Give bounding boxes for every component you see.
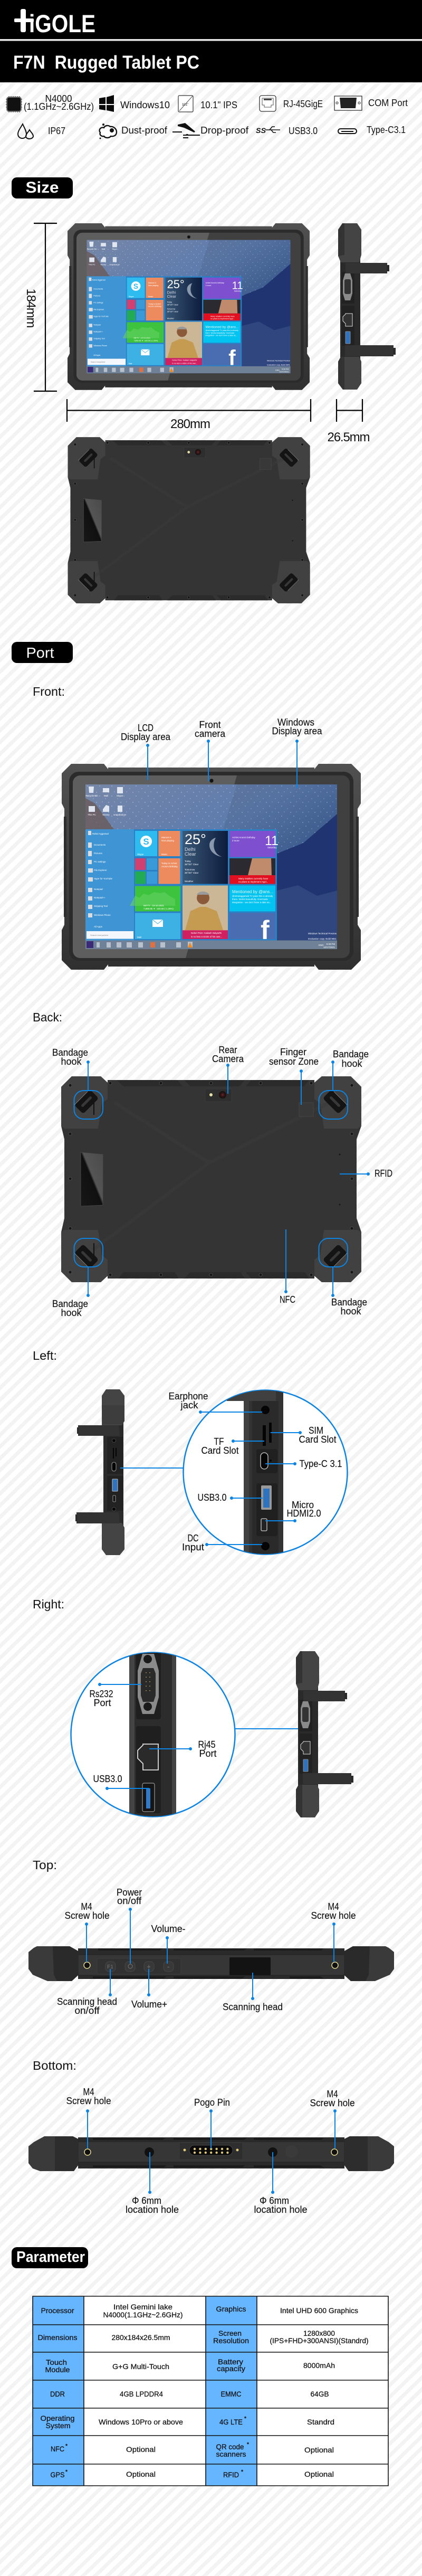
tablet front: Maroon 5 (161, 836, 171, 839)
callout: RJ45 port (149, 1739, 216, 1759)
callout: scanning head (223, 1973, 283, 2012)
tablet front: Achint Arora's birthday (232, 836, 256, 839)
text: RJ-45GigE: RJ-45GigE (283, 99, 323, 109)
text: 10.1 IPS: 10.1" IPS (200, 100, 237, 110)
text: Type-C3.1: Type-C3.1 (367, 125, 406, 135)
tablet bottom edge (28, 2136, 394, 2171)
callout: SIM card slot: Card Slot (299, 1434, 337, 1445)
icon: usb ss: SS (256, 126, 266, 135)
text: Dust-proof: Dust-proof (121, 125, 168, 136)
tablet front: Hype for YouTube (94, 877, 113, 880)
parameter table: 1280x800 (303, 2329, 335, 2337)
tablet front: Money (102, 813, 110, 816)
callout: pogo pin (194, 2097, 230, 2148)
callout: earphone jack: jack (180, 1400, 199, 1410)
callout: location hole right: location hole (254, 2204, 307, 2215)
tablet front: All Apps (94, 925, 103, 928)
parameter table: * (244, 2416, 247, 2422)
parameter table: RFID (223, 2470, 239, 2479)
dimension: width 280mm (67, 399, 311, 431)
callout: bandage hook top-right: Bandage (333, 1049, 369, 1059)
parameter table: GPS (51, 2470, 64, 2479)
callout: micro HDMI: HDMI2.0 (287, 1508, 321, 1519)
parameter table: * (65, 2469, 68, 2475)
callout: location hole left (126, 2152, 179, 2215)
dimension: height 184mm (24, 223, 57, 391)
callout: DC input: DC (188, 1533, 198, 1543)
parameter table: N4000(1.1GHz~2.6GHz) (103, 2310, 183, 2319)
callout: micro HDMI (265, 1500, 321, 1522)
tablet front: @rahulaggarwal TV pass this is already (232, 895, 273, 897)
callout: finger sensor zone: Finger (280, 1047, 306, 1057)
callout: RS232 port: Rs232 (90, 1689, 113, 1699)
callout: bandage hook bottom-right (319, 1238, 367, 1317)
callout: scanning head on/off (57, 1969, 117, 2016)
parameter table: NFC (51, 2445, 64, 2453)
callout: M4 screw hole left: Screw hole (64, 1910, 110, 1921)
heading: Port (12, 642, 73, 663)
parameter table: 280x184x26.5mm (112, 2333, 170, 2342)
parameter table: DDR (50, 2390, 65, 2398)
callout: RFID (340, 1168, 392, 1179)
icon: drop proof (172, 123, 200, 138)
tablet front: 25° (185, 831, 206, 847)
tablet front: Delhi (185, 847, 196, 852)
heading: Port: Port (26, 645, 54, 661)
callout: RJ45 port: Port (199, 1748, 216, 1759)
parameter table: Processor (41, 2306, 74, 2315)
callout: M4 screw hole right (310, 2089, 354, 2148)
callout: finger sensor zone: sensor Zone (269, 1056, 319, 1067)
callout: TF card slot: Card Slot (202, 1445, 238, 1456)
tablet front: 2 more (232, 839, 239, 842)
tablet top edge: + (147, 1963, 151, 1971)
parameter table: Windows 10Pro or above (99, 2418, 183, 2426)
logo: iGOLE (29, 10, 95, 37)
tablet front: Notepad (94, 888, 103, 891)
tablet front: Windows Phone (94, 914, 111, 916)
callout: bandage hook top-left (52, 1047, 103, 1119)
callout: LCD display area: Display area (121, 732, 171, 742)
parameter table: 8000mAh (303, 2361, 335, 2370)
callout: bandage hook top-left: Bandage (52, 1047, 88, 1058)
tablet front: Snipping Tool (94, 905, 108, 907)
parameter table: Optional (126, 2470, 156, 2478)
callout: USB3.0 (197, 1492, 263, 1503)
callout: location hole right (254, 2152, 307, 2215)
parameter table (33, 2296, 388, 2486)
size view: tablet back (68, 437, 310, 603)
parameter table: Optional (304, 2470, 334, 2478)
icon: rj45 (260, 96, 276, 111)
icon: usb ss (256, 126, 280, 135)
callout: bandage hook top-left: hook (61, 1056, 82, 1067)
parameter table: Intel UHD 600 Graphics (280, 2306, 358, 2315)
callout: finger sensor zone (269, 1047, 319, 1105)
callout: earphone jack: Earphone (169, 1391, 208, 1401)
callout: USB3.0 (93, 1774, 149, 1790)
callout: bandage hook bottom-left: hook (61, 1308, 82, 1318)
parameter table: * (65, 2443, 68, 2449)
heading: Parameter: Parameter (16, 2249, 85, 2266)
callout: USB3.0: USB3.0 (93, 1774, 122, 1784)
text: N4000: (1.1GHz~2.6GHz) (24, 101, 94, 112)
tablet front: Saturday (267, 846, 277, 849)
tablet front: integration - we don't have a date as... (232, 901, 271, 904)
callout: DC input (182, 1533, 262, 1552)
tablet front: 7,859.95 ▼ -100.60 (-1.26%) (143, 907, 174, 910)
heading: Size: Size (25, 179, 59, 196)
dimension: thickness 26.5mm (327, 399, 370, 444)
callout: M4 screw hole right: Screw hole (310, 2098, 354, 2108)
callout: M4 screw hole left: M4 (83, 2087, 94, 2097)
tablet front: Mail (104, 794, 108, 797)
parameter table: G+G Multi-Touch (112, 2362, 169, 2371)
callout: location hole right: Φ 6mm (260, 2195, 289, 2206)
tablet front: Documents (94, 844, 106, 846)
callout: RS232 port (90, 1683, 141, 1708)
text: N4000: N4000 (45, 93, 72, 104)
parameter table: EMMC (220, 2390, 242, 2398)
callout: windows display area (272, 717, 322, 788)
callout: LCD display area (121, 723, 171, 780)
callout: M4 screw hole left (64, 1901, 110, 1962)
callout: RFID: RFID (375, 1168, 392, 1179)
text: Windows10: Windows10 (120, 100, 170, 110)
callout: rear camera (212, 1045, 244, 1094)
section label: Top: Top: (33, 1858, 57, 1872)
dimension: thickness 26.5mm: 26.5mm (327, 430, 370, 444)
callout: NFC: NFC (280, 1294, 295, 1305)
section label: Back: Back: (33, 1010, 62, 1024)
text: IP67: IP67 (48, 126, 65, 136)
parameter table: * (241, 2469, 244, 2475)
tablet front: Today (185, 860, 191, 863)
callout: M4 screw hole left (66, 2087, 111, 2148)
callout: scanning head: Scanning head (223, 2002, 283, 2012)
callout: bandage hook bottom-right: hook (341, 1306, 361, 1317)
icon: dust (99, 124, 117, 139)
parameter table: Touch (46, 2358, 67, 2366)
callout: M4 screw hole left: Screw hole (66, 2096, 111, 2106)
text: USB3.0: USB3.0 (289, 126, 318, 136)
zoom lens: right ports (71, 1650, 235, 1821)
parameter table: 64GB (310, 2390, 329, 2398)
tablet front: ENG (319, 944, 324, 946)
callout: USB3.0: USB3.0 (197, 1492, 227, 1503)
section label: Left: Left: (33, 1349, 57, 1362)
callout: volume minus: Volume- (151, 1924, 186, 1934)
tablet front: Weather (185, 880, 194, 883)
tablet front: 10/17/2021 (323, 946, 335, 949)
tablet front: 5:39 PM (327, 943, 335, 945)
callout: scanning head on/off: on/off (75, 2005, 100, 2016)
parameter table: System (45, 2421, 71, 2430)
text: N4000 (24, 93, 94, 112)
callout: windows display area: Windows (277, 717, 314, 727)
callout: location hole left: Φ 6mm (132, 2195, 161, 2206)
tablet front: Pictures (94, 852, 103, 855)
parameter table: Graphics (216, 2305, 246, 2313)
heading: Size (12, 177, 73, 198)
callout: RS232 port: Port (94, 1698, 111, 1708)
tablet front: is no less a victim of his own... (191, 935, 222, 938)
tablet front: Evaluation copy. Build 9841 (308, 937, 337, 940)
icon: screen: 10.1" (182, 103, 188, 107)
section label: Bottom: Bottom: (33, 2059, 76, 2072)
callout: scanning head on/off: Scanning head (57, 1996, 117, 2007)
tablet front: 11 (265, 834, 279, 848)
callout: bandage hook top-right (319, 1049, 369, 1119)
tablet front: NIFTY - 10-10-2021 (143, 904, 165, 907)
tablet front: Skype (137, 853, 144, 856)
tablet front: 38°/20° Clear (185, 863, 199, 866)
size view: tablet front (68, 223, 310, 390)
callout: M4 screw hole left: M4 (81, 1901, 92, 1912)
tablet back (61, 1076, 361, 1282)
callout: TF card slot (202, 1436, 264, 1456)
callout: M4 screw hole right (311, 1901, 356, 1962)
connector line: left zoom (120, 1467, 183, 1469)
icon: water drops (18, 124, 33, 139)
feature icon strip (6, 93, 408, 139)
parameter table: * (247, 2441, 250, 2448)
tablet front: Music (161, 853, 168, 856)
section label: Right: Right: (33, 1597, 64, 1611)
tablet front (62, 764, 361, 970)
callout: TF card slot: TF (214, 1436, 224, 1447)
tablet front: Skype (117, 794, 123, 797)
header band (0, 0, 422, 82)
callout: power on/off: on/off (117, 1896, 142, 1906)
icon: screen (178, 96, 193, 112)
callout: SIM card slot: SIM (309, 1425, 323, 1436)
tablet front: there. Works beautifully. OneGuide (232, 898, 268, 901)
tablet front: File Explorer (94, 869, 107, 872)
tablet front: Search everywhere (90, 934, 109, 936)
tablet front: snapdeal.txt (113, 813, 127, 816)
callout: volume minus (151, 1924, 186, 1964)
tablet front: PC settings (94, 860, 106, 863)
connector line: right zoom (235, 1728, 300, 1729)
parameter table: (IPS+FHD+300ANSI)(Standrd) (270, 2336, 368, 2345)
product title: F7N Rugged Tablet PC (13, 52, 199, 73)
text: Drop-proof: Drop-proof (200, 125, 249, 136)
callout: power on/off (117, 1887, 142, 1964)
callout: windows display area: Display area (272, 726, 322, 736)
parameter table: Optional (126, 2445, 156, 2454)
callout: earphone jack (169, 1391, 262, 1414)
callout: DC input: Input (182, 1542, 204, 1552)
section label: Front: Front: (33, 685, 65, 698)
parameter table: Intel Gemini lake (113, 2303, 172, 2311)
tablet front: Tomorrow (185, 868, 195, 871)
icon: com port (334, 96, 362, 110)
callout: RJ45 port: Rj45 (198, 1739, 215, 1750)
callout: pogo pin: Pogo Pin (194, 2097, 230, 2108)
callout: front camera: Front (199, 719, 220, 730)
parameter table: 4G LTE (219, 2418, 243, 2426)
parameter table: Operating (40, 2414, 75, 2422)
callout: power on/off: Power (117, 1887, 142, 1898)
callout: bandage hook bottom-left (52, 1238, 103, 1318)
callout: micro HDMI: Micro (292, 1500, 314, 1510)
callout: SIM card slot (271, 1425, 337, 1445)
parameter table: 4GB LPDDR4 (120, 2390, 163, 2398)
tablet right side (296, 1651, 353, 1817)
parameter table: Battery (218, 2357, 243, 2366)
tablet top edge (28, 1946, 394, 1981)
callout: front camera: camera (195, 728, 226, 739)
tablet front: Today is Achint (161, 862, 177, 865)
parameter table: scanners (216, 2450, 246, 2458)
tablet front: Many retailers currently have (238, 877, 268, 880)
tablet front: S (143, 837, 149, 847)
callout: bandage hook top-right: hook (342, 1058, 362, 1069)
tablet front: Windows Technical Preview (308, 932, 337, 935)
callout: front camera (195, 719, 226, 781)
callout: Type-C 3.1 (265, 1459, 342, 1469)
icon: type-c (338, 129, 357, 134)
dimension: height 184mm: 184mm (24, 288, 38, 328)
callout: volume plus (131, 1969, 167, 2010)
tablet front: Arora's birthday. (161, 865, 178, 868)
callout: location hole left: location hole (126, 2204, 179, 2215)
parameter table: Resolution (213, 2336, 249, 2345)
callout: rear camera: Camera (212, 1054, 244, 1064)
callout: LCD display area: LCD (138, 723, 154, 733)
callout: bandage hook bottom-right: Bandage (331, 1297, 367, 1308)
tablet front: Recycle Bin (85, 794, 98, 797)
size view: tablet side (338, 223, 396, 390)
callout: Type-C 3.1: Type-C 3.1 (300, 1459, 342, 1469)
tablet front: Clear (185, 851, 196, 857)
callout: M4 screw hole right: Screw hole (311, 1910, 356, 1921)
parameter table: Screen (218, 2329, 242, 2337)
tablet front: Mentioned by @ans... (232, 889, 273, 894)
zoom lens: left ports (169, 1388, 347, 1559)
callout: rear camera: Rear (218, 1045, 237, 1055)
tablet front: no plans to implement Appl... (238, 880, 268, 883)
parameter table: capacity (217, 2364, 245, 2373)
tablet front: Nobel Prize: Kailash Satyarthi (191, 932, 222, 934)
text: COM Port: COM Port (368, 98, 408, 108)
callout: M4 screw hole right: M4 (327, 2089, 338, 2099)
dimension: width 280mm: 280mm (170, 417, 210, 431)
callout: volume plus: Volume+ (131, 1999, 167, 2010)
parameter table: Optional (304, 2446, 334, 2454)
callout: M4 screw hole right: M4 (328, 1901, 339, 1912)
tablet front: 36°/20° Clear (185, 872, 199, 874)
tablet top edge: - (167, 1963, 169, 1971)
parameter table: QR code (216, 2442, 244, 2451)
tablet front: Mail (137, 936, 141, 939)
tablet left side (75, 1389, 124, 1555)
tablet front: Notepad++ (94, 896, 106, 899)
icon: windows (99, 95, 114, 112)
parameter table: Dimensions (38, 2333, 77, 2342)
icon: cpu (6, 96, 22, 112)
tablet front: Rahul Aggarwal (92, 832, 109, 835)
tablet top edge: F1 (107, 1964, 113, 1970)
tablet front: This PC (88, 813, 96, 816)
callout: NFC (280, 1229, 295, 1305)
parameter table: Module (45, 2365, 70, 2374)
callout: bandage hook bottom-left: Bandage (52, 1299, 88, 1309)
tablet front: f (261, 915, 270, 945)
parameter table: Standrd (307, 2418, 334, 2426)
tablet front: Now playing (161, 839, 174, 842)
